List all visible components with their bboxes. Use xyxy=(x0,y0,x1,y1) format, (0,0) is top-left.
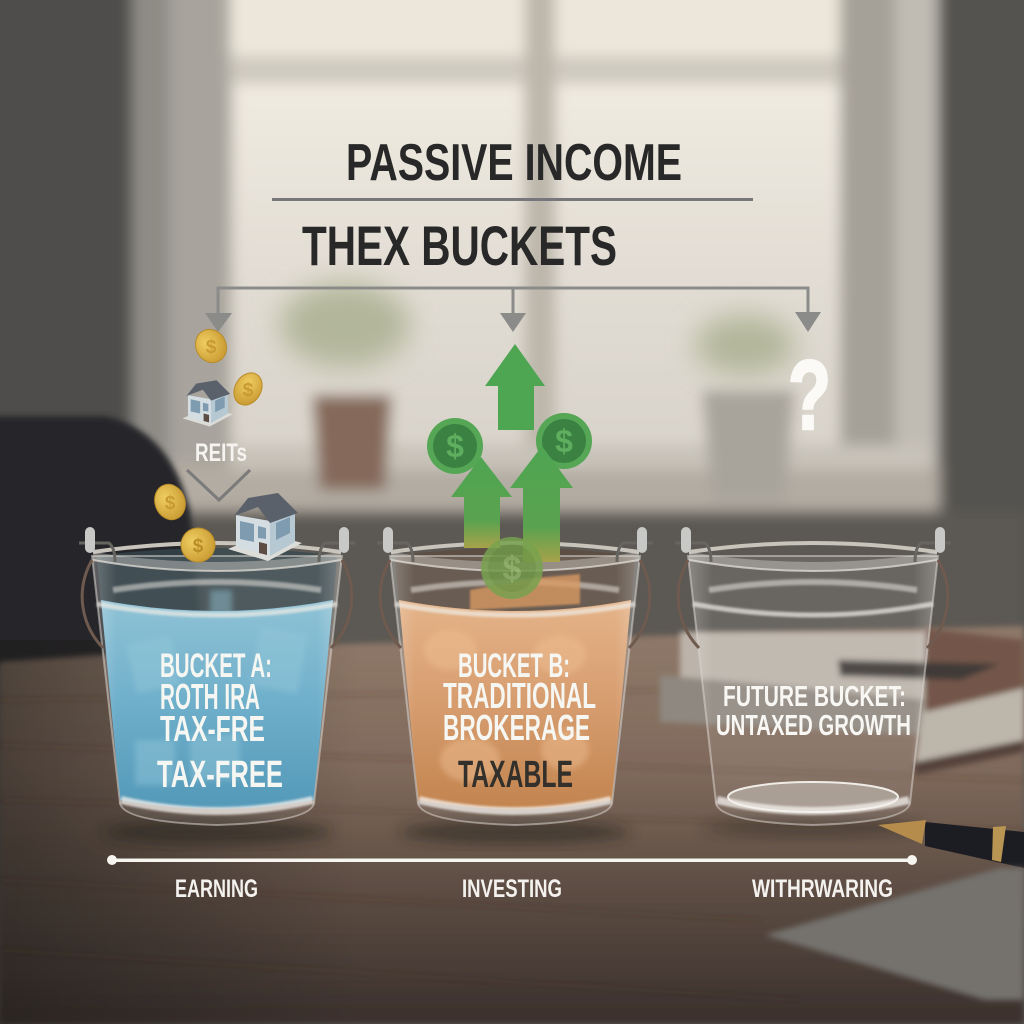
future bucket label: FUTURE BUCKET: xyxy=(723,681,906,713)
icons: upper coins xyxy=(190,324,268,410)
bucket B label: BROKERAGE xyxy=(443,707,590,748)
timeline labels: WITHRWARING xyxy=(752,875,893,903)
future bucket glass xyxy=(675,527,951,825)
title: passive income: PASSIVE INCOME xyxy=(346,134,682,192)
bucket A label: ROTH IRA xyxy=(160,676,260,717)
bucket B label xyxy=(443,647,596,796)
bucket A label: BUCKET A: xyxy=(160,647,272,685)
future bucket label: UNTAXED GROWTH xyxy=(716,710,911,742)
title divider line xyxy=(272,198,753,201)
subtitle: thex buckets: THEX BUCKETS xyxy=(302,214,617,277)
timeline xyxy=(107,855,917,865)
bucket A: Roth IRA xyxy=(79,527,355,825)
background: pen xyxy=(878,820,1024,868)
future bucket inner base xyxy=(728,782,898,812)
bucket A liquid xyxy=(101,600,333,809)
icons: lower coins xyxy=(150,480,220,567)
bucket A label: TAX-FREE xyxy=(157,754,283,796)
connector arrows from title to buckets xyxy=(205,288,821,332)
bucket A glass xyxy=(79,527,355,825)
bucket A label: TAX-FRE xyxy=(160,708,265,749)
icon: green growth arrows and dollar coins: $ xyxy=(503,550,522,588)
icon: large house on bucket rim xyxy=(228,493,302,561)
bucket B label: TRADITIONAL xyxy=(443,675,596,716)
bucket B submerged coins xyxy=(424,630,589,782)
bucket A label xyxy=(157,647,283,796)
bucket B dark interior xyxy=(395,548,635,616)
background: dark chair xyxy=(0,416,205,665)
icon: chevron arrow xyxy=(187,470,250,500)
background: books on the table xyxy=(660,628,1024,775)
bucket B label: BUCKET B: xyxy=(458,647,570,685)
timeline labels: EARNING xyxy=(175,875,258,903)
icons: lower coins: $ xyxy=(193,536,204,557)
icon: question mark: ? xyxy=(788,340,831,450)
timeline labels: INVESTING xyxy=(462,875,562,903)
icon: small house xyxy=(183,380,233,426)
timeline labels xyxy=(175,875,893,903)
background: wooden table xyxy=(0,626,1024,1024)
icons: lower coins: $ xyxy=(165,493,176,514)
bucket A dark interior xyxy=(97,548,337,616)
bucket B label: TAXABLE xyxy=(458,754,573,796)
label: REITs: REITs xyxy=(195,439,247,467)
icons: upper coins: $ xyxy=(243,380,254,401)
icons: upper coins: $ xyxy=(206,337,217,358)
future bucket label xyxy=(716,681,911,742)
bucket A submerged blocks xyxy=(126,590,308,785)
bucket B liquid xyxy=(399,600,631,809)
background: paper sheet xyxy=(765,868,1024,1000)
icon: green growth arrows and dollar coins xyxy=(427,344,592,610)
future bucket: untaxed growth xyxy=(675,527,951,825)
bucket B: traditional brokerage xyxy=(377,527,653,825)
bucket B glass xyxy=(377,527,653,825)
